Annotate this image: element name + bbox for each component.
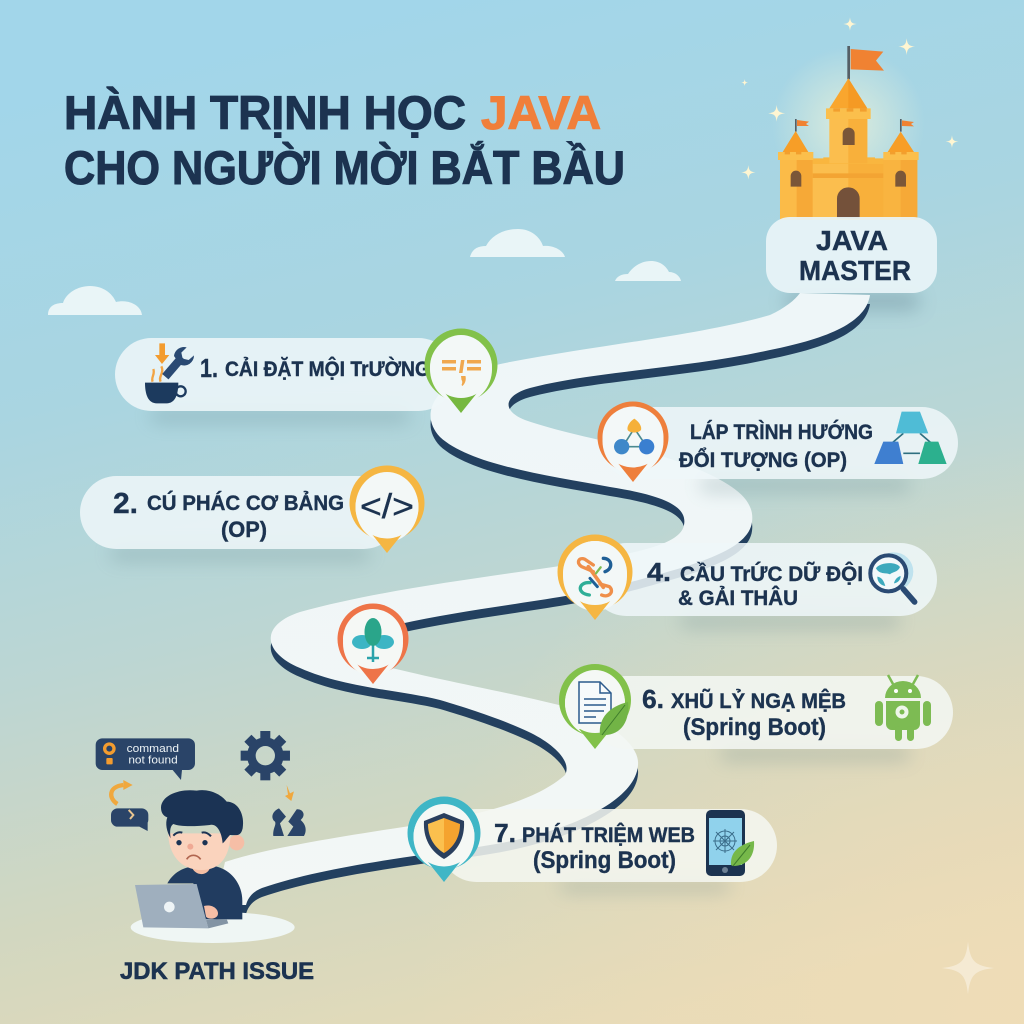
title: CHO NGƯỜI MỜI BẮT BẦU xyxy=(64,141,625,194)
icon: phone with web and leaf xyxy=(706,810,754,876)
pin 6 xyxy=(559,664,631,749)
winding road xyxy=(215,293,870,914)
step 4 panel: cấu trúc dữ liệu xyxy=(590,543,937,616)
step 3 panel: lập trình hướng đối tượng: ĐỔI TƯỢNG (OP) xyxy=(679,448,847,472)
icon: code tag: </> xyxy=(360,488,414,526)
face xyxy=(168,833,231,870)
pin 4 xyxy=(558,534,632,620)
laptop xyxy=(135,884,228,928)
icon: code symbols xyxy=(442,360,481,386)
step 3 panel: lập trình hướng đối tượng: LÁP TRÌNH HƯỚNG xyxy=(690,420,873,444)
icon: gear xyxy=(241,731,290,780)
step 1 panel: cài đặt môi trường xyxy=(115,338,455,411)
icon: linked data structure xyxy=(578,558,611,596)
icon: retry arrow xyxy=(111,780,133,804)
icon: coffee cup and wrench xyxy=(145,343,194,403)
pin 2 xyxy=(350,466,424,553)
step 7 panel: phát triển web: (Spring Boot) xyxy=(533,847,676,874)
icon: down arrow xyxy=(285,785,294,801)
step 3 panel: lập trình hướng đối tượng xyxy=(600,407,958,479)
step 6 panel: xử lý ngoại lệ xyxy=(590,675,953,749)
label: java master xyxy=(766,217,937,293)
icon: document with leaf xyxy=(579,682,628,735)
step 4 panel: cấu trúc dữ liệu: CẦU TrỨC DỮ ĐỘI xyxy=(680,562,863,586)
step 1 text: CẢI ĐẶT MỘI TrƯỜNG xyxy=(225,357,430,381)
step 4 panel: cấu trúc dữ liệu: 4. xyxy=(647,557,671,587)
error speech bubble: not found xyxy=(128,754,178,766)
pin 5 xyxy=(338,604,408,684)
label shadow: java master xyxy=(785,292,920,310)
hair xyxy=(161,790,243,843)
pin 7 xyxy=(408,796,480,882)
icon: android robot xyxy=(875,675,931,741)
clouds xyxy=(48,229,681,315)
small speech bubble xyxy=(111,808,148,831)
step 1 text: 1. xyxy=(200,353,218,383)
label: java master: MASTER xyxy=(799,255,911,286)
icon: magnifier xyxy=(870,552,915,602)
step 2 panel: cú pháp cơ bản xyxy=(80,476,400,549)
decorative star xyxy=(942,942,994,994)
step 7 panel: phát triển web: 7. xyxy=(494,818,516,848)
error speech bubble xyxy=(96,738,195,780)
ground oval xyxy=(131,912,295,943)
error speech bubble: command xyxy=(127,743,179,755)
step 2 panel: cú pháp cơ bản: (OP) xyxy=(221,517,267,542)
person body xyxy=(167,866,242,919)
caption: jdk path issue: JDK PATH ISSUE xyxy=(120,958,314,985)
icon: sprout xyxy=(352,618,394,662)
icon: class hierarchy blocks xyxy=(874,412,947,464)
person illustration: jdk path issue xyxy=(96,731,306,943)
icon: broken link xyxy=(272,808,306,836)
step 6 panel: xử lý ngoại lệ: XHŨ LỶ NGẠ MỆB xyxy=(671,689,846,713)
castle illustration xyxy=(741,17,958,220)
title: JAVA xyxy=(481,86,601,139)
pin 3 xyxy=(598,402,668,482)
step 2 panel: cú pháp cơ bản: 2. xyxy=(113,488,138,520)
pill shadows xyxy=(110,409,910,892)
step 7 panel: phát triển web: PHÁT TRIỆM WEB xyxy=(522,823,695,847)
step 6 panel: xử lý ngoại lệ: 6. xyxy=(642,684,664,714)
ear xyxy=(229,835,244,850)
hand xyxy=(204,905,218,919)
pin 1 xyxy=(424,328,498,413)
title xyxy=(64,86,625,194)
step 6 panel: xử lý ngoại lệ: (Spring Boot) xyxy=(683,714,826,741)
eyes and mouth xyxy=(173,832,211,859)
step 1 text xyxy=(200,353,430,383)
step 2 panel: cú pháp cơ bản: CÚ PHÁC CƠ BẢNG xyxy=(147,491,344,515)
label: java master: JAVA xyxy=(816,225,888,256)
step 4 panel: cấu trúc dữ liệu: & GẢI THÂU xyxy=(678,586,798,610)
icon: shield xyxy=(424,813,464,859)
title: HÀNH TRỊNH HỌC xyxy=(64,86,466,139)
icon: object graph xyxy=(614,419,654,454)
step 7 panel: phát triển web xyxy=(440,809,777,882)
